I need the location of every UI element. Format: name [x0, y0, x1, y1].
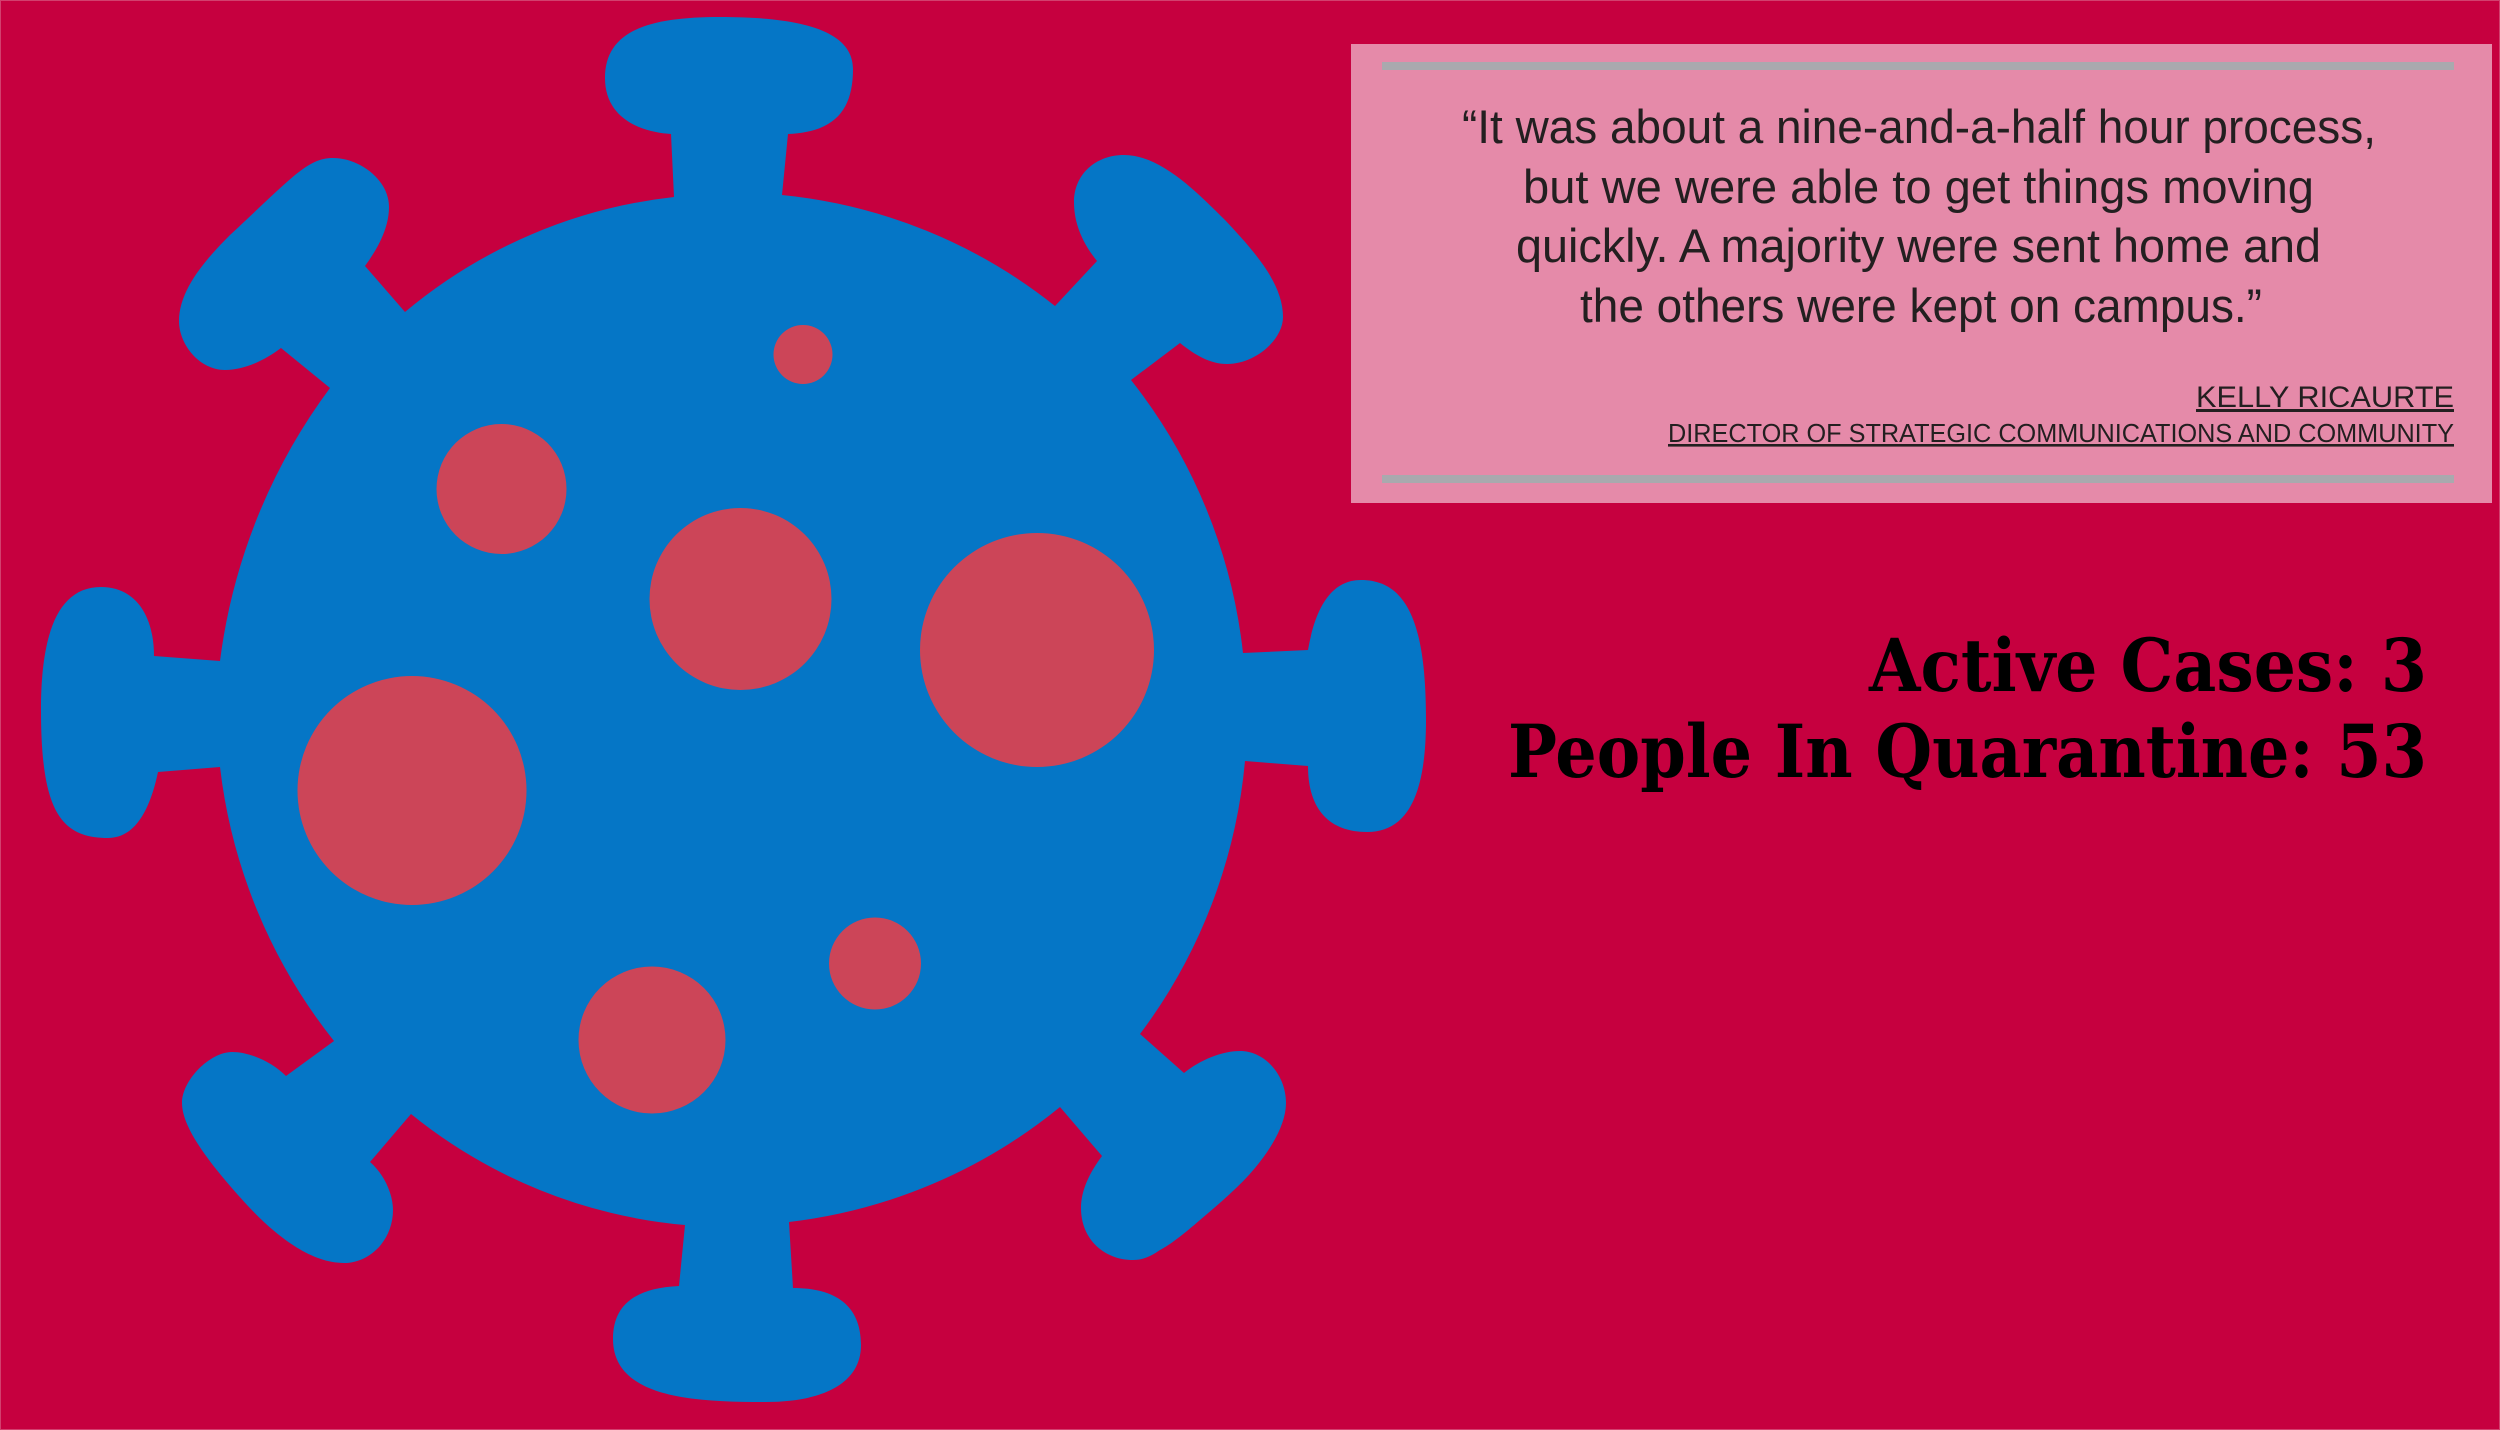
quote text	[1462, 100, 2376, 332]
panel: quote	[1351, 44, 2492, 503]
virus body with spikes	[41, 17, 1426, 1402]
top rule	[1382, 62, 2454, 70]
icon: coronavirus	[41, 17, 1426, 1402]
quote text: “It was about a nine-and-a-half hour process,	[1462, 100, 2376, 153]
quote background	[1351, 44, 2492, 503]
attribution name: KELLY RICAURTE	[2196, 381, 2454, 414]
virus spots	[298, 325, 1154, 1114]
quote text: quickly. A majority were sent home and	[1516, 219, 2321, 272]
attribution title: DIRECTOR OF STRATEGIC COMMUNICATIONS AND COMMUNITY	[1668, 418, 2454, 448]
quote text: but we were able to get things moving	[1523, 160, 2314, 213]
quote text: the others were kept on campus.”	[1580, 279, 2262, 332]
stat: active cases: Active Cases: 3	[1868, 623, 2427, 709]
bottom rule	[1382, 475, 2454, 483]
